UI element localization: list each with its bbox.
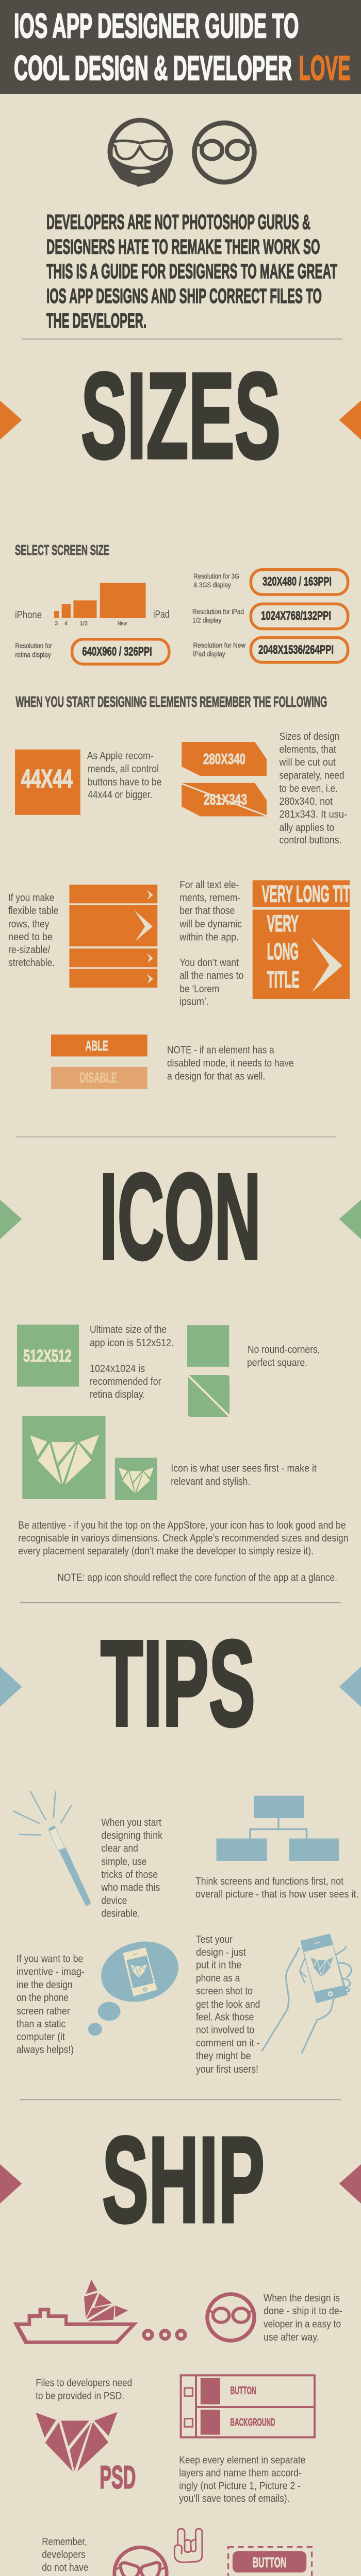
panel: test on the phone: your first users! — [196, 2063, 258, 2075]
chart: device screen size comparison: iPhone — [15, 609, 42, 621]
panel: able and disabled buttons: ABLE — [86, 1038, 108, 1054]
panel: dynamic text elements: LONG — [267, 938, 299, 964]
panel: dynamic text elements: VERY — [267, 910, 299, 937]
panel: dynamic text elements — [179, 879, 361, 1008]
panel: perfect square: No round-corners, — [248, 1344, 320, 1355]
resolution: iPad 1/2: 1/2 display — [192, 616, 222, 624]
resolution: new iPad — [193, 637, 348, 663]
panel: photoshop skills: developers — [42, 2549, 86, 2561]
chart: device screen size comparison: 4 — [64, 621, 68, 627]
panel: even element sizes: Sizes of design — [280, 731, 339, 742]
resolution: 3G: & 3GS display — [193, 581, 231, 589]
panel: perfect square: perfect square. — [247, 1357, 307, 1368]
panel: able and disabled buttons: disabled mode, it needs to have — [167, 1057, 294, 1069]
panel: icon size: 1024x1024 is — [90, 1363, 145, 1375]
title banner — [0, 0, 361, 94]
panel: psd files: Files to developers need — [36, 2377, 132, 2389]
panel: even element sizes — [182, 731, 347, 846]
panel: psd files: PSD — [100, 2460, 136, 2496]
panel: app icon examples: Icon is what user sees first - make it — [171, 1463, 317, 1475]
panel: 44x44 button: As Apple recom- — [87, 750, 154, 762]
panel: 44x44 button: mends, all control — [88, 763, 159, 775]
panel: ship to developer: done - ship it to de- — [264, 2305, 342, 2317]
resolution: new iPad: Resolution for New — [193, 641, 245, 649]
panel: test on the phone: phone as a — [196, 1972, 240, 1984]
panel: even element sizes: separately, need — [280, 770, 344, 781]
resolution: iPad 1/2 — [192, 604, 348, 629]
panel: dynamic text elements: ipsum’. — [179, 996, 209, 1008]
panel: test on the phone: design - just — [196, 1946, 246, 1958]
panel: ship to developer — [13, 2279, 342, 2344]
panel: imagine on the phone — [17, 1933, 185, 2056]
panel: even element sizes: 281X343 — [204, 791, 247, 808]
panel: flexible table rows: flexible table — [8, 905, 58, 917]
panel: magic wand tip: tricks of those — [101, 1869, 158, 1880]
resolution: retina: 640X960 / 326PPI — [82, 645, 152, 658]
panel: imagine on the phone: screen rather — [17, 2005, 70, 2017]
panel: magic wand tip: simple, use — [101, 1856, 146, 1868]
panel: magic wand tip: When you start — [101, 1817, 161, 1828]
panel: even element sizes: 281x343. It usu- — [280, 808, 347, 820]
panel: icon size: Ultimate size of the — [90, 1324, 167, 1335]
panel: cut out buttons: BUTTON — [253, 2554, 286, 2570]
panel: magic wand tip: clear and — [101, 1842, 138, 1854]
panel: layers — [179, 2375, 316, 2504]
panel: flexible table rows: If you make — [8, 892, 54, 904]
panel: app icon examples — [22, 1416, 317, 1500]
panel: test on the phone: get the look and — [196, 1998, 260, 2010]
panel: icon size: 512X512 — [23, 1346, 72, 1365]
chart: device screen size comparison: 3 — [55, 621, 58, 627]
panel: dynamic text elements: TITLE — [267, 967, 299, 993]
subheading: select screen size: SELECT SCREEN SIZE — [15, 542, 109, 558]
panel: test on the phone: they might be — [196, 2050, 251, 2062]
text: be attentive — [18, 1519, 348, 1557]
resolution: iPad 1/2: Resolution for iPad — [192, 608, 244, 616]
panel: magic wand tip: desirable. — [101, 1907, 140, 1919]
resolution: retina: Resolution for — [15, 642, 52, 650]
panel: test on the phone: Test your — [196, 1934, 233, 1945]
panel: test on the phone: feel. Ask those — [196, 2011, 254, 2023]
panel: even element sizes: to be even, i.e. — [280, 783, 338, 794]
panel: icon size: recommended for — [90, 1376, 161, 1387]
panel: magic wand tip: designing think — [101, 1829, 163, 1841]
panel: perfect square — [184, 1325, 320, 1420]
panel: flexible table rows — [8, 885, 157, 988]
panel: test on the phone: not involved to — [196, 2024, 254, 2036]
panel: magic wand tip — [13, 1791, 163, 1919]
panel: test on the phone: comment on it - — [196, 2037, 260, 2049]
panel: even element sizes: 280X340 — [203, 751, 245, 768]
panel: even element sizes: control buttons. — [280, 834, 341, 846]
panel: 44x44 button: buttons have to be — [88, 776, 161, 788]
panel: flexible table rows: stretchable. — [8, 957, 55, 969]
panel: dynamic text elements: ber that those — [179, 905, 235, 917]
intro text — [46, 211, 337, 332]
panel: able and disabled buttons: DISABLE — [79, 1070, 117, 1086]
panel: cut out buttons — [228, 2547, 312, 2576]
chart: device screen size comparison: 1/2 — [80, 621, 88, 627]
panel: photoshop skills: do not have — [42, 2562, 88, 2573]
panel: imagine on the phone: inventive - imag- — [17, 1966, 85, 1978]
panel: psd files: to be provided in PSD. — [36, 2390, 124, 2402]
panel: test on the phone: put it in the — [196, 1959, 241, 1971]
panel: dynamic text elements: within the app. — [179, 931, 239, 943]
panel: magic wand tip: device — [101, 1894, 127, 1906]
panel: even element sizes: ally applies to — [280, 822, 334, 834]
icon: designer and developer faces — [107, 118, 254, 187]
panel: imagine on the phone: computer (it — [17, 2031, 65, 2043]
panel: flexible table rows: re-sizable/ — [8, 944, 51, 956]
text: be attentive: every placement separately (don’t make the developer to simply resize it). — [18, 1545, 314, 1557]
panel: photoshop skills — [42, 2529, 202, 2576]
panel: dynamic text elements: will be dynamic — [179, 918, 242, 930]
panel: flexible table rows: need to be — [8, 931, 53, 943]
panel: dynamic text elements: You don’t want — [179, 957, 239, 969]
panel: layers: BUTTON — [230, 2384, 256, 2397]
panel: test on the phone — [196, 1934, 351, 2075]
panel: layers: BACKGROUND — [230, 2416, 275, 2428]
panel: psd files — [36, 2377, 136, 2496]
panel: layers: Keep every element in separate — [179, 2454, 305, 2466]
panel: flexible table rows: rows, they — [8, 918, 50, 930]
panel: able and disabled buttons — [51, 1035, 294, 1089]
resolution: 3G: 320X480 / 163PPI — [262, 575, 332, 588]
panel: layers: ingly (not Picture 1, Picture 2 - — [179, 2480, 301, 2492]
panel: test on the phone: screen shot to — [196, 1985, 253, 1997]
panel: ship to developer: veloper in a easy to — [264, 2318, 341, 2330]
panel: photoshop skills: Remember, — [42, 2536, 87, 2548]
chart: device screen size comparison — [15, 583, 169, 627]
panel: icon size: retina display. — [90, 1388, 145, 1400]
panel: dynamic text elements: ments, remem- — [179, 892, 240, 904]
resolution: new iPad: iPad display — [193, 650, 225, 658]
panel: even element sizes: elements, that — [280, 743, 336, 755]
panel: magic wand tip: who made this — [101, 1882, 160, 1893]
resolution: 3G: Resolution for 3G — [193, 572, 239, 580]
intro text: THE DEVELOPER. — [46, 310, 146, 332]
panel: even element sizes: will be cut out — [279, 756, 336, 768]
panel: 44x44 button: 44x44 or bigger. — [88, 789, 153, 801]
panel: imagine on the phone: ine the design — [17, 1979, 73, 1991]
panel: imagine on the phone: If you want to be — [17, 1953, 83, 1965]
panel: dynamic text elements: all the names to — [179, 970, 243, 981]
panel: able and disabled buttons: NOTE - if an element has a — [167, 1044, 274, 1056]
panel: able and disabled buttons: a design for that as well. — [167, 1070, 265, 1082]
panel: screen flow diagram — [195, 1796, 359, 1900]
panel: ship to developer: use after way. — [264, 2331, 319, 2343]
panel: app icon examples: relevant and stylish. — [171, 1476, 250, 1487]
chart: device screen size comparison: iPad — [153, 609, 169, 620]
panel: 44x44 button: 44X44 — [21, 765, 73, 793]
panel: imagine on the phone: always helps!) — [17, 2044, 74, 2056]
panel: layers: layers and name them accord- — [179, 2467, 302, 2479]
panel: imagine on the phone: on the phone — [17, 1992, 69, 2004]
chart: device screen size comparison: New — [118, 621, 127, 627]
resolution: iPad 1/2: 1024X768/132PPI — [261, 609, 331, 623]
panel: layers: you’ll save tones of emails). — [179, 2493, 290, 2504]
panel: ship to developer: When the design is — [264, 2292, 340, 2304]
panel: even element sizes: 280x340, not — [280, 795, 333, 807]
resolution: retina: retina display — [15, 651, 51, 658]
panel: dynamic text elements: be ‘Lorem — [179, 983, 219, 995]
panel: imagine on the phone: than a static — [17, 2018, 65, 2030]
panel: 44x44 button — [15, 750, 161, 815]
panel: icon size: app icon is 512x512. — [90, 1337, 174, 1349]
panel: dynamic text elements: For all text ele- — [179, 879, 239, 891]
panel: icon size — [17, 1324, 174, 1400]
resolution: 3G — [193, 570, 348, 595]
resolution: retina — [15, 639, 169, 664]
